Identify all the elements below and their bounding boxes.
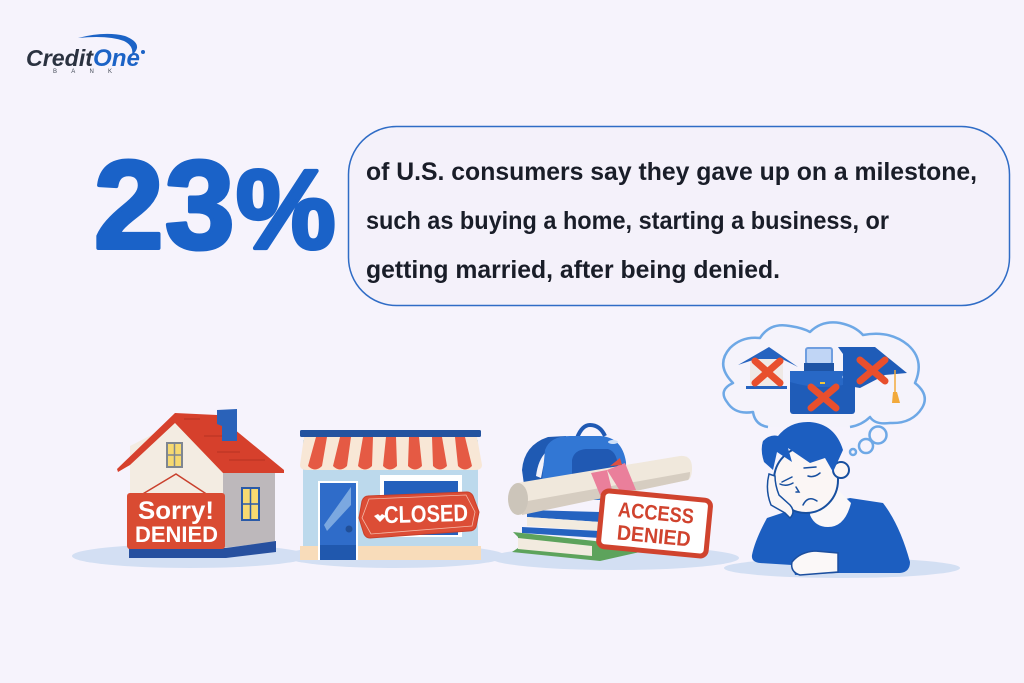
sign: Access Denied (598, 490, 711, 557)
callout: milestone statement: getting married, after being denied. (366, 256, 780, 284)
callout: milestone statement (348, 126, 1010, 306)
sweater body (752, 498, 910, 575)
callout: milestone statement: such as buying a home, starting a business, or (366, 207, 889, 235)
thought cloud with crossed-out milestones (723, 322, 925, 455)
sign: Sorry! Denied: DENIED (135, 522, 218, 547)
backpack (522, 425, 627, 500)
logo: Credit One Bank: One (93, 45, 140, 72)
ear (833, 462, 849, 478)
illustration: house with denied sign (117, 409, 284, 558)
illustration: closed shop (300, 430, 482, 560)
awning (300, 437, 482, 470)
illustration: sad person resting head on hand (752, 422, 910, 575)
logo: Credit One Bank: Credit (26, 45, 94, 71)
sign: Sorry! Denied: Sorry! (138, 497, 214, 525)
shop window (380, 475, 462, 537)
bubble trail (850, 426, 886, 455)
sign: Access Denied: ACCESS (617, 498, 695, 529)
sign: Closed: CLOSED (384, 500, 468, 529)
icon: chimney (217, 409, 237, 441)
icon: crossed briefcase (790, 348, 855, 414)
facial features (780, 467, 820, 505)
big statistic: 23% (94, 136, 336, 275)
sign: Sorry! Denied (127, 493, 225, 549)
icon: crossed graduation cap (838, 347, 907, 403)
logo: Credit One Bank (26, 34, 145, 75)
big statistic: 23%: % (236, 147, 336, 272)
diploma scroll (508, 456, 692, 515)
callout: milestone statement: of U.S. consumers say they gave up on a milestone, (366, 158, 977, 186)
illustration: backpack, books, diploma and access denied sign (508, 425, 711, 561)
door (318, 481, 358, 560)
big statistic: 23%: 3 (165, 136, 235, 275)
sign: Closed (359, 492, 479, 538)
big statistic: 23%: 2 (94, 136, 164, 275)
icon: crossed house (738, 347, 798, 389)
sign: Access Denied: DENIED (616, 521, 692, 551)
face (774, 447, 838, 513)
ground shadows (72, 544, 960, 578)
hand on table (792, 551, 838, 575)
red crosses (755, 360, 885, 408)
icon: attic window (166, 442, 183, 468)
hand on cheek (767, 474, 793, 518)
book stack (512, 510, 640, 561)
hair (762, 422, 843, 472)
icon: side window (241, 487, 260, 521)
logo: Credit One Bank: BANK (53, 69, 112, 75)
